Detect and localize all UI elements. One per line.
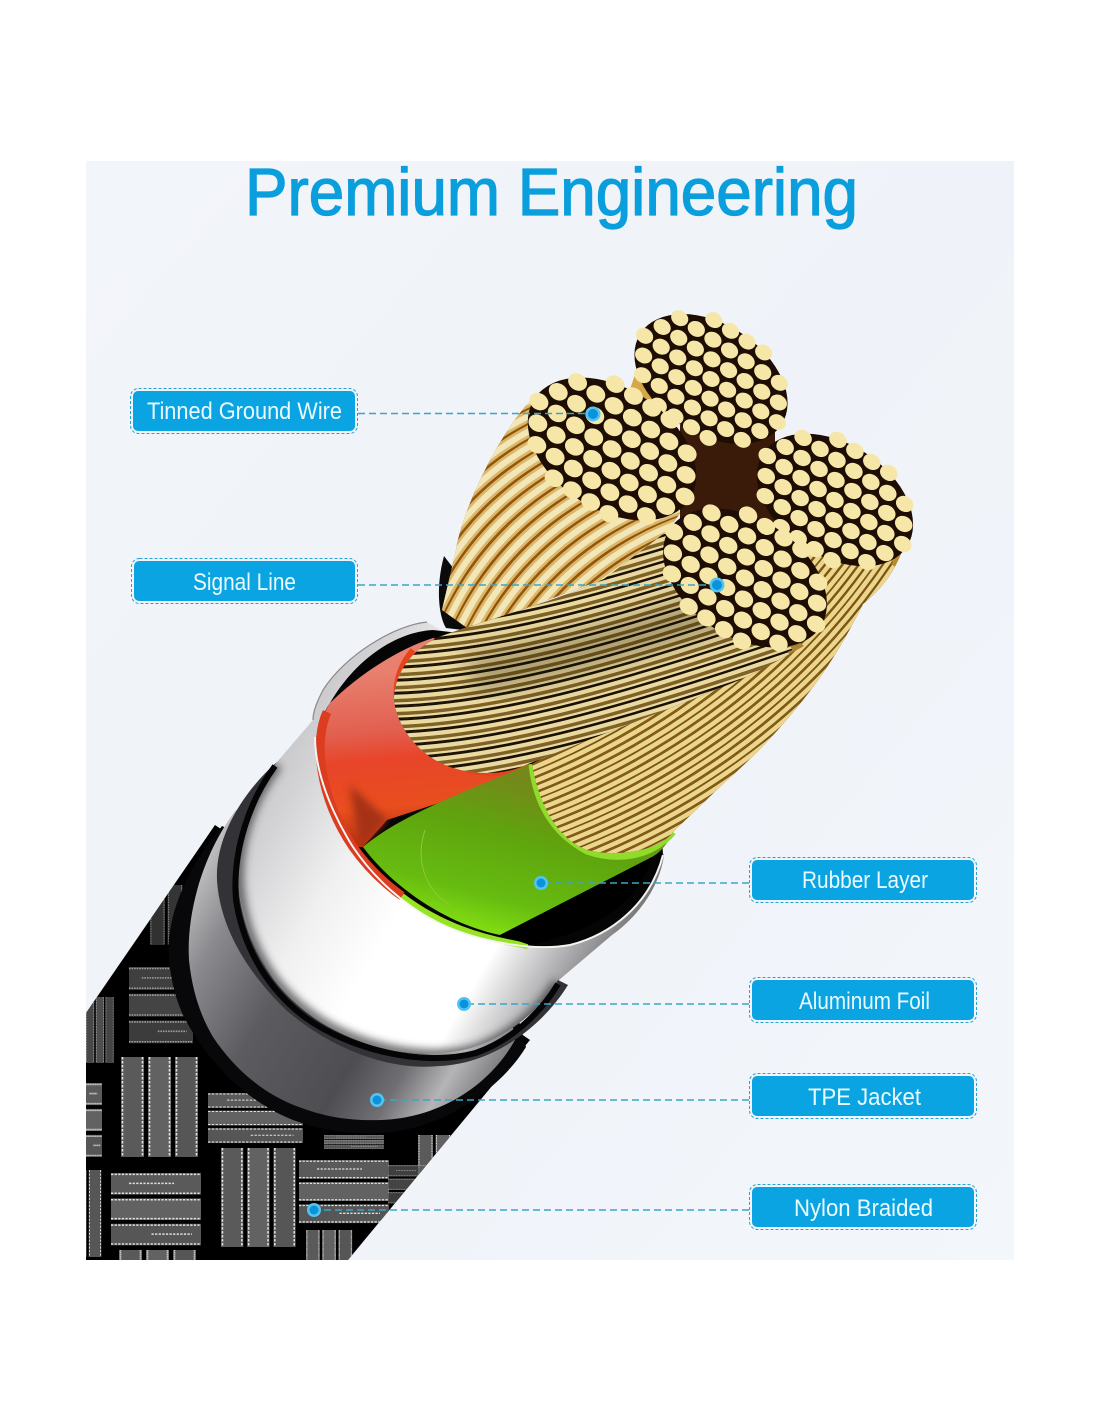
callout: Signal Line <box>132 558 724 604</box>
callout: Tinned Ground Wire: Tinned Ground Wire <box>147 398 342 425</box>
dark core gap <box>680 425 775 525</box>
infographic canvas <box>86 161 1014 1260</box>
black ground wire sheath <box>438 556 466 630</box>
dark ring <box>217 762 568 1067</box>
copper bundle: from red core <box>394 532 804 773</box>
callout: Aluminum Foil: Aluminum Foil <box>799 988 930 1015</box>
callout: TPE Jacket: TPE Jacket <box>808 1084 921 1111</box>
callout: Tinned Ground Wire <box>130 388 600 434</box>
callout: Nylon Braided: Nylon Braided <box>794 1195 933 1222</box>
rubber layer: green insulation <box>363 764 673 946</box>
strand face: right <box>756 430 914 570</box>
nylon braided sleeve <box>59 820 536 1260</box>
strand face: tinned ground wire <box>527 373 697 525</box>
TPE jacket <box>168 810 526 1133</box>
copper bundle: from green core <box>532 553 902 854</box>
copper bundle: upper left <box>442 401 680 628</box>
cable illustration <box>59 287 937 1260</box>
callout: Rubber Layer: Rubber Layer <box>802 867 928 894</box>
black cavity <box>500 857 652 945</box>
background panel <box>86 161 1014 1260</box>
foil rim <box>315 737 663 947</box>
callout: TPE Jacket <box>370 1074 976 1118</box>
red insulation <box>320 638 528 896</box>
callout: Rubber Layer <box>534 858 976 902</box>
gold sliver behind top bundle <box>630 376 652 400</box>
callout: Signal Line: Signal Line <box>193 569 296 596</box>
strand face: signal line <box>662 504 828 652</box>
aluminum foil <box>236 622 664 1055</box>
callout: Nylon Braided <box>307 1184 976 1230</box>
callout: Aluminum Foil <box>457 978 976 1022</box>
cable opening <box>318 630 663 947</box>
title: Premium Engineering <box>245 155 858 230</box>
strand face: top <box>634 310 788 448</box>
